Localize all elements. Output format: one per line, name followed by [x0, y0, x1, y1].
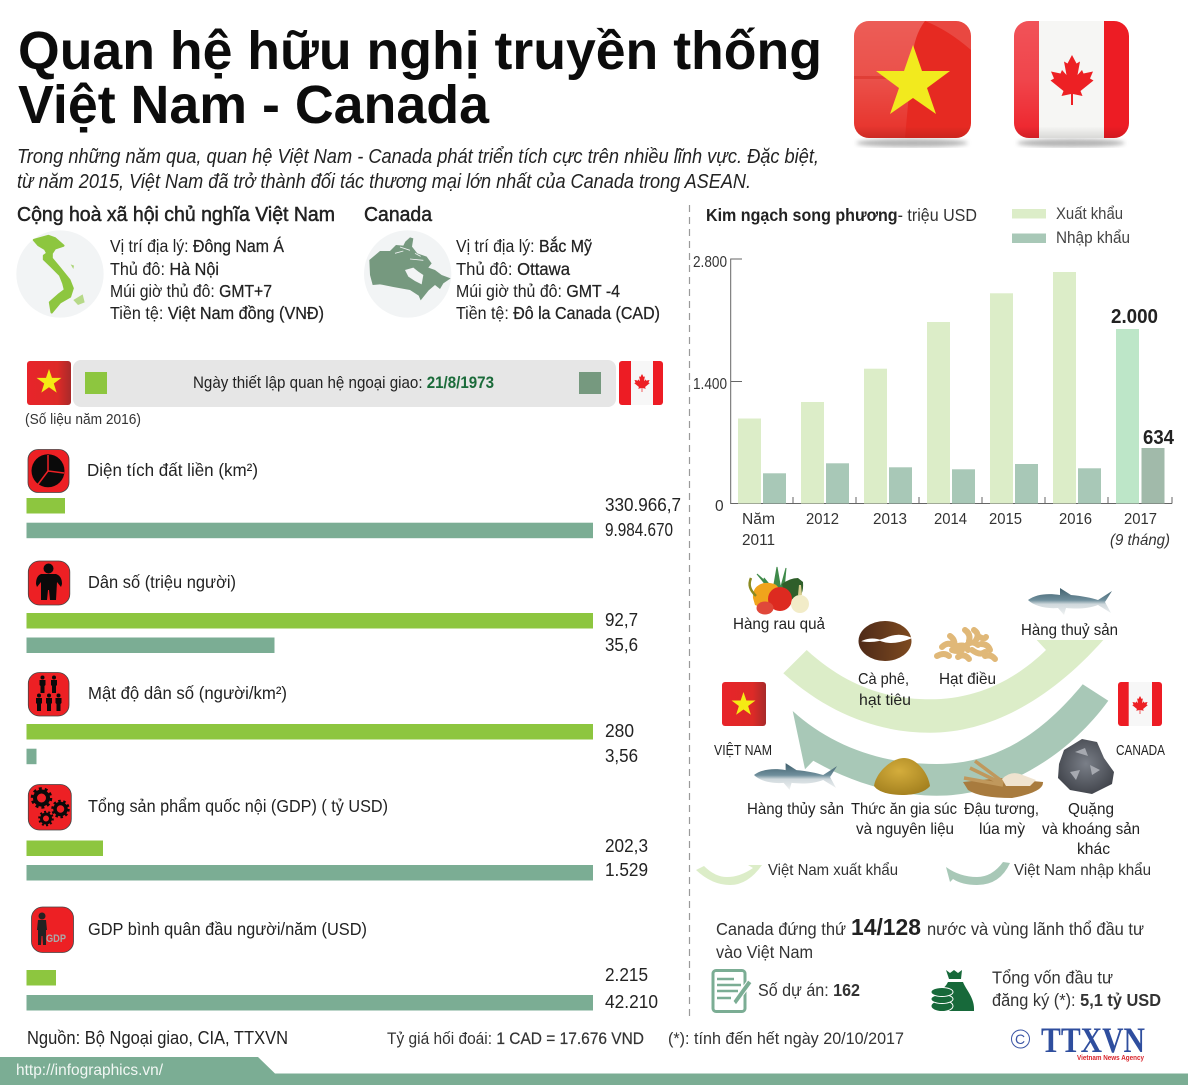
info: Canada: Tiền tệ: Đô la Canada (CAD) [456, 303, 660, 323]
bar chart: bilateral trade: 2014 [934, 511, 967, 528]
label: CANADA [1116, 743, 1165, 759]
investment rank text: nước và vùng lãnh thổ đầu tư [927, 919, 1144, 939]
source: Nguồn: Bộ Ngoại giao, CIA, TTXVN [27, 1028, 288, 1048]
row: GDP: Tổng sản phẩm quốc nội (GDP) ( tỷ USD) [88, 796, 388, 816]
investment rank text: 14/128 [851, 914, 921, 940]
legend: exports arrow [696, 861, 898, 885]
icon: animal feed pile [874, 758, 930, 795]
label [964, 801, 1039, 838]
label: hạt tiêu [859, 692, 911, 709]
row: land area [26, 450, 681, 540]
bar chart: bilateral trade: 2012 [806, 511, 839, 528]
label: Hàng rau quả [733, 616, 825, 633]
info: Canada: Thủ đô: Ottawa [456, 259, 570, 279]
title [18, 21, 822, 135]
row: population density: Mật độ dân số (người/km²) [88, 683, 287, 703]
info: Vietnam: Thủ đô: Hà Nội [110, 259, 219, 279]
bar chart: bilateral trade: 1.400 [693, 376, 727, 393]
label: Hàng thủy sản [747, 801, 844, 818]
icon: fish top [1028, 588, 1112, 615]
title: Việt Nam - Canada [18, 75, 490, 135]
row: land area: 9.984.670 [605, 519, 673, 540]
intro text [17, 145, 819, 193]
row: GDP per capita [26, 907, 658, 1012]
legend: exports arrow: Việt Nam xuất khẩu [768, 861, 898, 879]
icon: cashews [937, 630, 995, 659]
intro text: Trong những năm qua, quan hệ Việt Nam - Canada phát triển tích cực trên nhiều lĩnh vực. Đặc biệt, [17, 145, 819, 168]
info: Vietnam: Vị trí địa lý: Đông Nam Á [110, 236, 284, 256]
bar chart: bilateral trade: 2015 [989, 511, 1022, 528]
label: Đậu tương, [964, 801, 1039, 818]
row: land area: Diện tích đất liền (km²) [87, 460, 258, 480]
row: population [26, 561, 638, 655]
info: Canada: Vị trí địa lý: Bắc Mỹ [456, 235, 592, 256]
investment rank text: vào Việt Nam [716, 942, 813, 962]
bar chart: bilateral trade: 2013 [873, 511, 907, 528]
icon: vegetables [750, 567, 809, 614]
project count: Số dự án: 162 [758, 980, 860, 1000]
note: data year: (Số liệu năm 2016) [25, 411, 141, 428]
footnote: (*): tính đến hết ngày 20/10/2017 [668, 1030, 904, 1048]
info: Canada: Múi giờ thủ đô: GMT -4 [456, 281, 620, 301]
map: Canada [364, 230, 451, 318]
label: Hạt điều [939, 671, 996, 688]
icon: group of people [28, 672, 69, 716]
legend: imports arrow [946, 861, 1151, 885]
intro text: từ năm 2015, Việt Nam đã trở thành đối tác thương mại lớn nhất của Canada trong ASEAN. [17, 170, 751, 193]
label: và nguyên liệu [856, 821, 954, 838]
row: population: 35,6 [605, 634, 638, 655]
chart legend [1012, 205, 1130, 247]
logo: TTXVN [1012, 1020, 1145, 1062]
row: GDP: 202,3 [605, 835, 648, 856]
bar chart: bilateral trade [693, 254, 1175, 549]
bar chart: bilateral trade: 2.800 [693, 254, 727, 271]
label [1042, 801, 1140, 858]
icon: Vietnam flag [722, 682, 766, 726]
label: VIỆT NAM [714, 742, 772, 759]
row: GDP: 1.529 [605, 859, 648, 880]
icon: GDP person [32, 907, 74, 952]
label: lúa mỳ [979, 821, 1025, 838]
bar chart: bilateral trade: 0 [715, 498, 724, 515]
bar chart: bilateral trade: 2011 [742, 532, 775, 549]
row: population density: 3,56 [605, 745, 638, 766]
footer band [0, 1057, 1188, 1085]
heading: Canada: Canada [364, 203, 433, 226]
bar chart: bilateral trade: 634 [1143, 427, 1175, 449]
investment capital [992, 968, 1161, 1010]
info: Vietnam: Tiền tệ: Việt Nam đồng (VNĐ) [110, 303, 324, 323]
bar chart: bilateral trade: 2016 [1059, 511, 1092, 528]
legend: imports arrow: Việt Nam nhập khẩu [1014, 861, 1151, 879]
icon: document [713, 970, 752, 1012]
row: GDP per capita: 2.215 [605, 964, 648, 985]
icon: person [28, 561, 70, 605]
exchange rate: Tỷ giá hối đoái: 1 CAD = 17.676 VND [387, 1030, 644, 1048]
bar chart: bilateral trade: Năm [742, 511, 775, 528]
arrow: Vietnam imports [793, 684, 1108, 796]
title: Quan hệ hữu nghị truyền thống [18, 21, 822, 81]
investment capital: Tổng vốn đầu tư [992, 968, 1113, 988]
logo: TTXVN: Vietnam News Agency [1077, 1053, 1145, 1062]
row: population density: 280 [605, 720, 634, 741]
label [858, 671, 911, 709]
bar chart: bilateral trade: 2.000 [1111, 306, 1158, 328]
label: Hàng thuỷ sản [1021, 622, 1118, 639]
row: population: 92,7 [605, 609, 638, 630]
label [851, 801, 957, 838]
logo: TTXVN: TTXVN [1041, 1020, 1145, 1060]
chart legend: Nhập khẩu [1056, 229, 1130, 247]
icon: large Vietnam flag [854, 21, 971, 147]
heading: Vietnam: Cộng hoà xã hội chủ nghĩa Việt Nam [17, 203, 335, 226]
investment rank text: Canada đứng thứ [716, 919, 846, 939]
diplomatic relations banner: Ngày thiết lập quan hệ ngoại giao: 21/8/1973 [193, 374, 494, 392]
footer band: http://infographics.vn/ [16, 1062, 164, 1079]
icon: coffee bean [858, 621, 912, 661]
map: Vietnam [16, 230, 104, 318]
info: Canada [456, 235, 660, 323]
label: Cà phê, [858, 671, 909, 688]
label: và khoáng sản [1042, 821, 1140, 838]
diplomatic relations banner [73, 360, 616, 407]
investment rank text [716, 914, 1144, 962]
arrow: Vietnam exports [783, 640, 1103, 733]
bar chart: bilateral trade: 2017 [1124, 511, 1157, 528]
chart legend: Xuất khẩu [1056, 205, 1123, 223]
investment capital: đăng ký (*): 5,1 tỷ USD [992, 990, 1161, 1010]
row: population: Dân số (triệu người) [88, 572, 236, 592]
icon: gears [28, 784, 71, 830]
row: GDP [26, 784, 648, 880]
label: Quặng [1068, 801, 1114, 818]
icon: small Vietnam flag [27, 361, 71, 405]
row: land area: 330.966,7 [605, 494, 681, 515]
info: Vietnam: Múi giờ thủ đô: GMT+7 [110, 281, 272, 301]
row: GDP per capita: 42.210 [605, 991, 658, 1012]
icon: small Canada flag [619, 361, 663, 405]
row: population density [26, 672, 638, 766]
logo: TTXVN: C [1015, 1031, 1025, 1047]
icon: money bag [931, 970, 974, 1012]
chart title: Kim ngạch song phương- triệu USD [706, 205, 977, 225]
icon: fish bottom [754, 763, 837, 790]
icon: pie chart [28, 450, 69, 492]
label: Thức ăn gia súc [851, 801, 957, 818]
icon: ore [1058, 739, 1114, 794]
icon: GDP person: GDP [46, 933, 66, 945]
label: khác [1077, 841, 1110, 858]
icon: large Canada flag [1014, 21, 1129, 147]
bar chart: bilateral trade: (9 tháng) [1110, 532, 1170, 549]
row: GDP per capita: GDP bình quân đầu người/năm (USD) [88, 919, 367, 939]
icon: Canada flag [1118, 682, 1162, 726]
icon: wheat and soybean [963, 761, 1043, 798]
info: Vietnam [110, 236, 324, 323]
